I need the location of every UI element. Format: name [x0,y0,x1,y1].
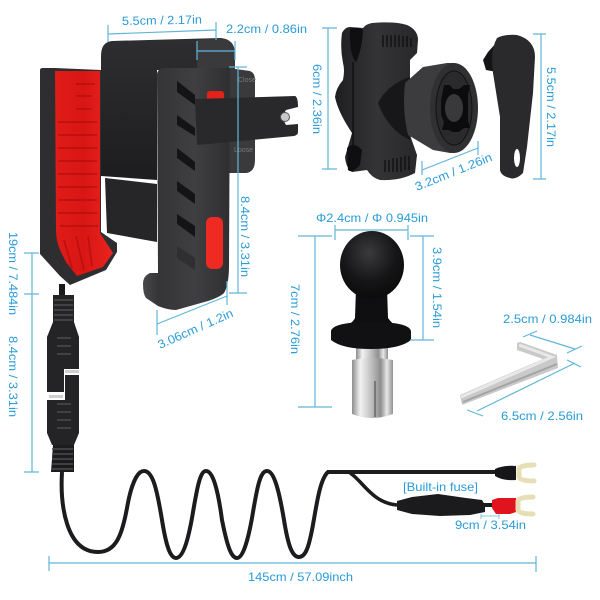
arm seam [352,62,354,150]
back plate [101,38,235,180]
swivel neck [378,77,410,140]
dimension: ball height [410,236,444,340]
lower spade fork [518,497,533,514]
coiled cable [62,471,495,558]
dimension: holder depth: 2.2cm / 0.86in [226,22,307,36]
dimension: total and connector length: 8.4cm / 3.31in [6,336,20,417]
phone holder [40,38,298,310]
inline fuse holder [397,494,485,516]
dimension: clamp width [156,281,235,352]
label: loose: Loose [234,147,253,154]
dimension: knob: 3.2cm / 1.26in [413,150,494,194]
dimension: fuse lead: 9cm / 3.54in [455,518,526,532]
flange [331,322,411,349]
dimension: clamp height [229,67,252,293]
red pill [206,217,223,269]
label: close: Close [238,77,256,84]
right clamp [143,68,230,310]
dimension: wrench: 5.5cm / 2.17in [544,67,558,147]
dimension: total and connector length: 19cm / 7.484in [6,232,20,315]
chrome post [352,346,393,418]
knob inner ring [436,71,472,145]
tightening plate [228,68,255,173]
dimension: ball mount height: 7cm / 2.76in [288,284,302,354]
hex key [460,342,558,405]
fuse to terminal wire [484,503,494,507]
socket hub [445,94,463,122]
wrench body [492,35,535,178]
wrench hole [514,149,520,167]
fuse branch [350,473,397,505]
dimension: clamp height: 8.4cm / 3.31in [238,196,252,277]
dimension: ball height: 3.9cm / 1.54in [430,247,444,328]
lower plate [105,178,157,242]
left clamp [40,68,117,285]
arm body [335,22,418,180]
dimension: total and connector length [6,232,39,472]
knob barrel [404,63,454,153]
left clamp red grip [55,71,113,276]
dimension: clamp width: 3.06cm / 1.2in [156,306,235,352]
SAE connector [47,295,79,472]
dimension: ball mount height [288,236,332,407]
black terminal [495,466,516,480]
dimension: cable length: 145cm / 57.09inch [248,570,353,584]
wrench [483,35,535,178]
cross socket [441,85,470,132]
dimension: cable length [49,556,536,584]
dimension: ball diameter: Φ2.4cm / Φ 0.945in [316,211,428,225]
clamp lever [195,96,298,145]
label: built-in fuse: [Built-in fuse] [403,480,478,494]
knob face [430,63,478,153]
wrench hub [483,42,497,72]
red terminal [492,498,516,514]
back plate side block [197,38,235,70]
upper spade fork [519,465,534,481]
dimension: ball diameter [316,211,428,240]
arm holes [347,28,363,171]
dimension: arm height: 6cm / 2.36in [310,64,324,134]
arm top ridges [383,35,411,172]
cable from holder [59,284,65,298]
dimension: arm height [310,28,337,169]
connector cable [47,284,534,558]
red button [207,91,224,101]
dimension: wrench [533,34,558,179]
dimension: hex key short arm [503,312,592,353]
ball [340,231,404,299]
dimension: hex key short arm: 2.5cm / 0.984in [503,312,592,326]
dimension: hex key long arm [467,360,583,423]
clamp vent slots [177,81,195,270]
ball mount [331,231,411,418]
dimension: hex key long arm: 6.5cm / 2.56in [501,409,583,423]
dimension: holder width [108,13,216,42]
dimension: holder width: 5.5cm / 2.17in [122,13,202,28]
lever bolt [280,112,290,122]
mounting arm [335,22,478,180]
neck [342,288,400,328]
dimension: holder depth [197,22,307,60]
